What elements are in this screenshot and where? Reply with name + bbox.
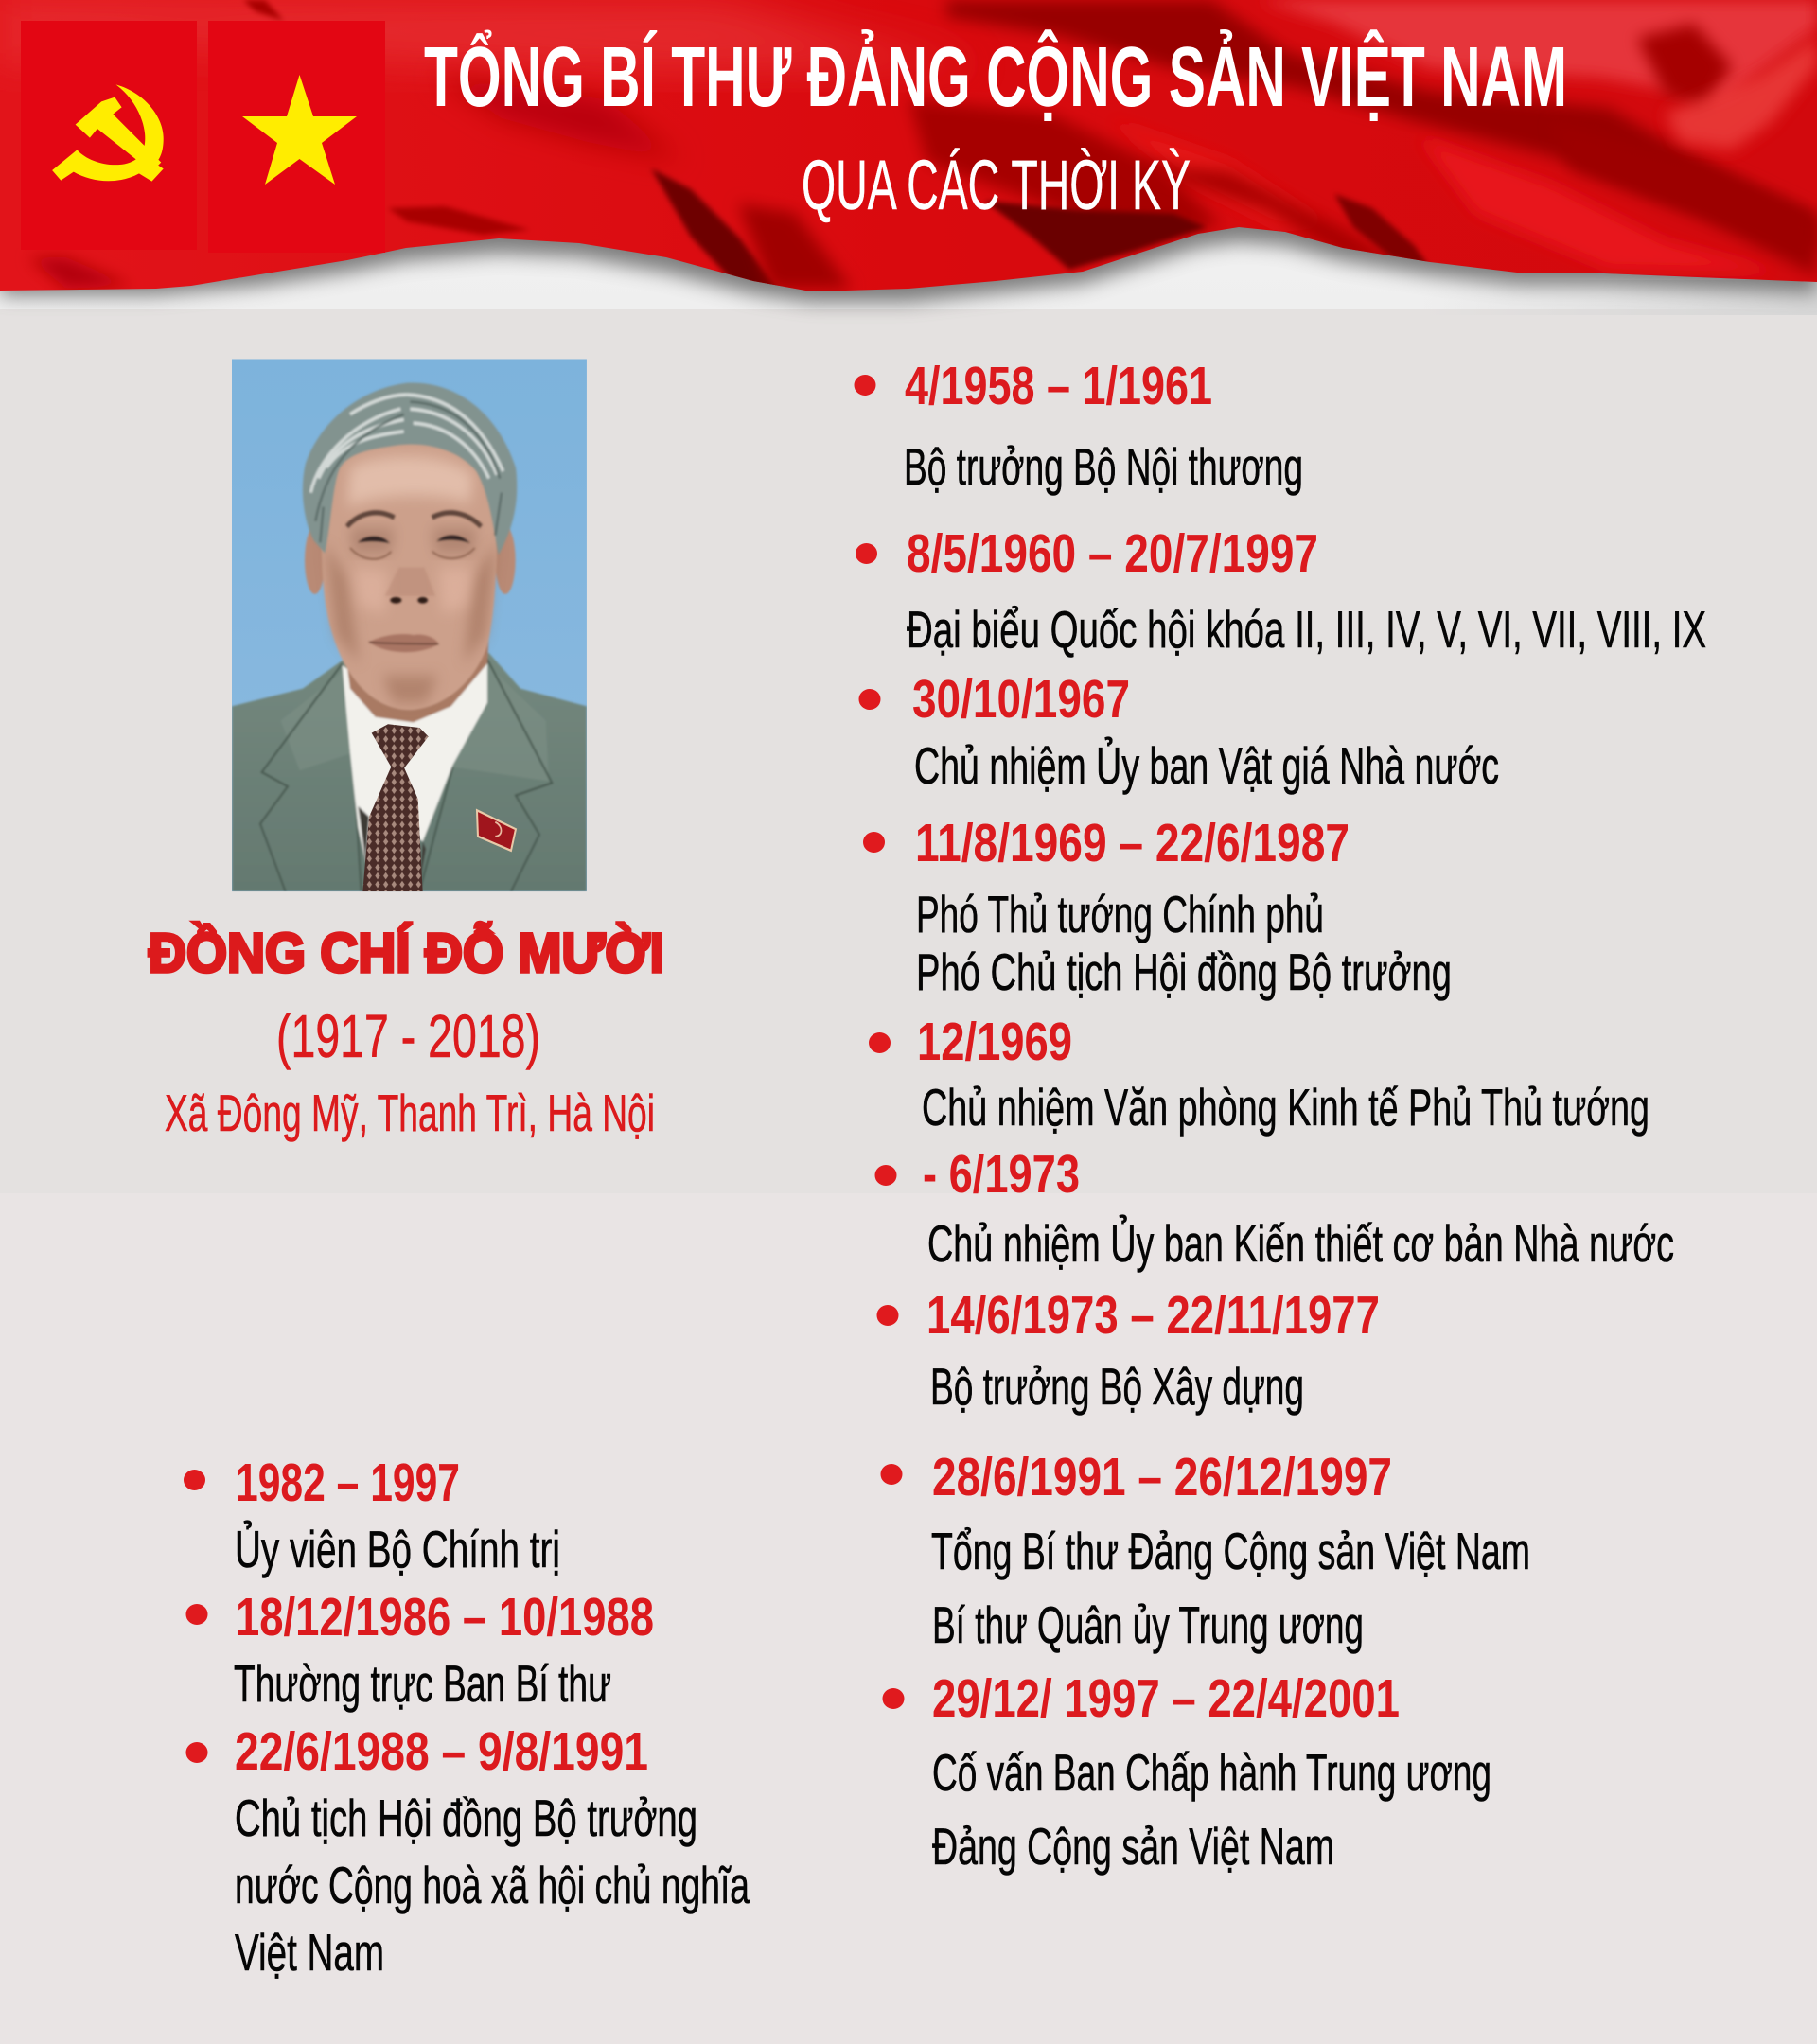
timeline entry: 28/6/1991 – 26/12/1997: Tổng Bí thư Đảng Cộng sản Việt Nam xyxy=(931,1522,1530,1580)
timeline entry: 11/8/1969 – 22/6/1987 xyxy=(863,813,1452,1001)
timeline entry: 22/6/1988 – 9/8/1991: Việt Nam xyxy=(235,1923,384,1982)
lifespan: (1917 - 2018) xyxy=(276,1002,540,1070)
neck xyxy=(344,635,489,722)
timeline entry: 29/12/1997 – 22/4/2001: Đảng Cộng sản Việt Nam xyxy=(932,1817,1334,1876)
timeline entry: 12/1969 xyxy=(869,1012,1649,1137)
jacket xyxy=(232,653,587,891)
birthplace: Xã Đông Mỹ, Thanh Trì, Hà Nội xyxy=(165,1084,655,1142)
timeline entry: - 6/1973: - 6/1973 xyxy=(923,1144,1080,1205)
header banner: red flag xyxy=(0,0,1817,315)
timeline entry: 22/6/1988 – 9/8/1991: Chủ tịch Hội đồng Bộ trưởng xyxy=(235,1788,697,1847)
timeline entry: 11/8/1969 – 22/6/1987: Phó Chủ tịch Hội đồng Bộ trưởng xyxy=(916,943,1452,1001)
portrait photo xyxy=(232,359,587,891)
timeline entry: 29/12/1997 – 22/4/2001: Cố vấn Ban Chấp hành Trung ương xyxy=(932,1743,1491,1802)
timeline entry: 4/1958 – 1/1961: 4/1958 – 1/1961 xyxy=(905,356,1212,416)
eyebrows xyxy=(347,513,395,526)
face xyxy=(322,435,497,710)
hair xyxy=(303,382,517,555)
timeline entry: - 6/1973 xyxy=(874,1144,1674,1273)
timeline entry: 8/5/1960 – 20/7/1997 xyxy=(856,523,1706,659)
timeline entry: 1982 – 1997: 1982 – 1997 xyxy=(236,1453,460,1513)
timeline entry: 11/8/1969 – 22/6/1987: 11/8/1969 – 22/6/1987 xyxy=(915,813,1350,873)
timeline entry: 14/6/1973 – 22/11/1977: Bộ trưởng Bộ Xây dựng xyxy=(930,1357,1304,1416)
timeline entry: 28/6/1991 – 26/12/1997: 28/6/1991 – 26/12/1997 xyxy=(932,1447,1392,1507)
page background upper xyxy=(0,309,1817,1193)
timeline entry: 18/12/1986 – 10/1988: Thường trực Ban Bí thư xyxy=(234,1654,611,1713)
subtitle: QUA CÁC THỜI KỲ xyxy=(802,146,1191,224)
timeline entry: 1982 – 1997 xyxy=(184,1453,560,1578)
soft highlights xyxy=(0,0,984,71)
timeline entry: 29/12/1997 – 22/4/2001: 29/12/ 1997 – 22/4/2001 xyxy=(932,1668,1400,1729)
timeline entry: 1982 – 1997: Ủy viên Bộ Chính trị xyxy=(235,1520,560,1578)
shirt xyxy=(343,657,487,863)
timeline entry: 28/6/1991 – 26/12/1997: Bí thư Quân ủy Trung ương xyxy=(932,1595,1364,1654)
timeline entry: 11/8/1969 – 22/6/1987: Phó Thủ tướng Chính phủ xyxy=(916,885,1324,943)
timeline entry: 28/6/1991 – 26/12/1997 xyxy=(880,1447,1530,1654)
timeline entry: 18/12/1986 – 10/1988 xyxy=(185,1587,654,1713)
mouth xyxy=(369,634,438,652)
icon: party flag with hammer and sickle xyxy=(21,21,197,250)
timeline entry: 22/6/1988 – 9/8/1991: nước Cộng hoà xã hội chủ nghĩa xyxy=(235,1856,750,1914)
dark folds xyxy=(946,0,1817,254)
timeline entry: 30/10/1967 xyxy=(859,669,1499,795)
lapels xyxy=(260,657,552,891)
timeline entry: 4/1958 – 1/1961 xyxy=(854,356,1303,496)
ears xyxy=(305,526,325,594)
timeline entry: 22/6/1988 – 9/8/1991 xyxy=(185,1721,750,1982)
timeline entry: 8/5/1960 – 20/7/1997: 8/5/1960 – 20/7/1997 xyxy=(907,523,1318,584)
timeline entry: 14/6/1973 – 22/11/1977: 14/6/1973 – 22/11/1977 xyxy=(926,1285,1380,1346)
page background lower xyxy=(0,1193,1817,2044)
timeline entry: 30/10/1967: Chủ nhiệm Ủy ban Vật giá Nhà nước xyxy=(914,736,1499,795)
timeline entry: 30/10/1967: 30/10/1967 xyxy=(912,669,1130,730)
tie xyxy=(372,724,429,768)
icon: national flag with yellow star xyxy=(208,21,385,253)
face shading xyxy=(347,456,473,507)
timeline entry: 14/6/1973 – 22/11/1977 xyxy=(876,1285,1380,1416)
timeline entry: 29/12/1997 – 22/4/2001 xyxy=(882,1668,1491,1876)
timeline entry: 18/12/1986 – 10/1988: 18/12/1986 – 10/1988 xyxy=(236,1587,654,1648)
timeline entry: 4/1958 – 1/1961: Bộ trưởng Bộ Nội thương xyxy=(904,437,1303,496)
eyes xyxy=(358,537,390,543)
timeline entry: 22/6/1988 – 9/8/1991: 22/6/1988 – 9/8/1991 xyxy=(235,1721,648,1782)
timeline entry: 12/1969: 12/1969 xyxy=(917,1012,1072,1072)
nose xyxy=(385,568,435,596)
name heading: ĐỒNG CHÍ ĐỖ MƯỜI xyxy=(149,923,664,984)
lapel pin xyxy=(477,810,516,851)
